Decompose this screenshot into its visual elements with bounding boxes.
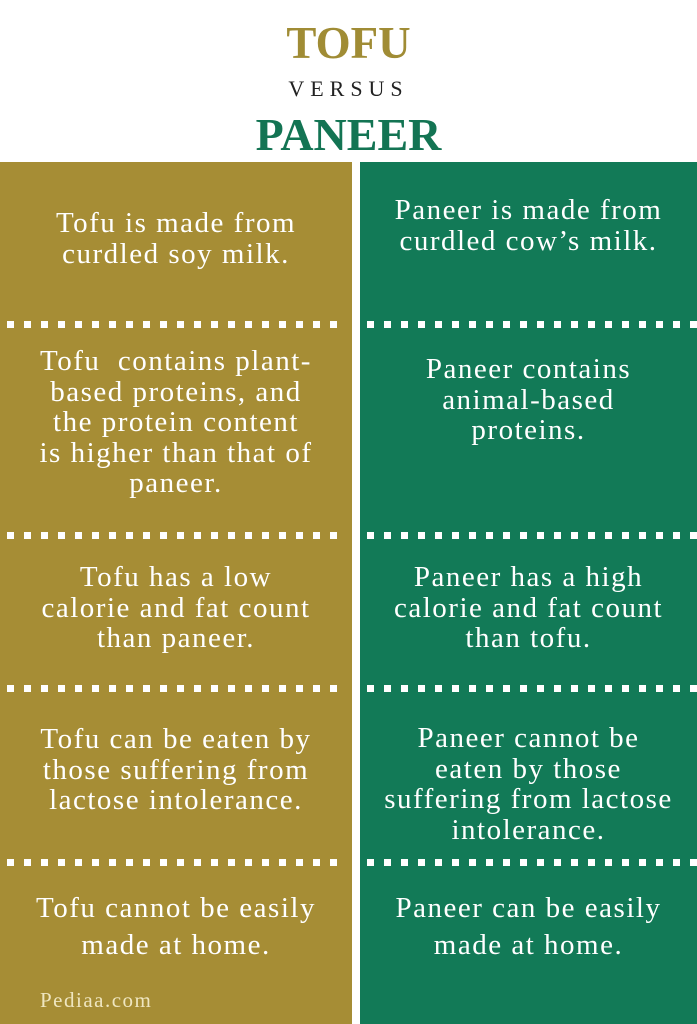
text: tofu row 5: Tofu cannot be easily — [36, 892, 316, 924]
text: paneer row 3: than tofu. — [465, 622, 592, 654]
text: tofu row 5: made at home. — [81, 929, 271, 961]
text: paneer row 2: proteins. — [471, 414, 586, 446]
text: paneer row 5 — [396, 892, 661, 961]
text: tofu row 2 — [39, 345, 312, 499]
text: tofu row 2: based proteins, and — [50, 376, 302, 408]
panel: paneer column — [360, 162, 697, 1024]
text: paneer row 1 — [395, 194, 662, 256]
text: tofu row 4: lactose intolerance. — [49, 784, 303, 816]
text: paneer row 4: suffering from lactose — [384, 783, 673, 815]
text: paneer row 5: made at home. — [434, 929, 623, 961]
text: paneer row 4: Paneer cannot be — [417, 722, 640, 754]
logo: pediaa: Pediaa.com — [40, 988, 152, 1012]
text: tofu row 4 — [40, 723, 312, 816]
text: paneer row 5: Paneer can be easily — [396, 892, 661, 924]
title: paneer: PANEER — [256, 109, 441, 160]
title: tofu: TOFU — [286, 18, 411, 68]
text: paneer row 1: curdled cow’s milk. — [399, 224, 658, 256]
text: tofu row 4: those suffering from — [43, 754, 309, 786]
text: paneer row 3: Paneer has a high — [414, 561, 643, 593]
text: paneer row 4 — [384, 722, 673, 846]
text: paneer row 2: animal-based — [442, 384, 615, 416]
text: paneer row 3 — [394, 561, 663, 654]
text: tofu row 2: Tofu contains plant- — [40, 345, 312, 377]
text: tofu row 5 — [36, 892, 316, 961]
text: tofu row 3: Tofu has a low — [80, 561, 272, 593]
text: tofu row 1: Tofu is made from — [56, 207, 296, 239]
text: paneer row 2: Paneer contains — [426, 353, 631, 385]
text: tofu row 1: curdled soy milk. — [62, 238, 290, 270]
text: tofu row 2: is higher than that of — [39, 436, 312, 468]
text: tofu row 3: calorie and fat count — [41, 592, 311, 624]
text: paneer row 4: intolerance. — [451, 814, 606, 846]
text: paneer row 1: Paneer is made from — [395, 194, 662, 226]
panel: tofu column — [0, 162, 352, 1024]
text: tofu row 3: than paneer. — [97, 622, 255, 654]
text: paneer row 3: calorie and fat count — [394, 592, 663, 624]
text: tofu row 4: Tofu can be eaten by — [40, 723, 312, 755]
text: paneer row 2 — [426, 353, 631, 446]
text: tofu row 2: the protein content — [53, 406, 299, 438]
subtitle: versus: VERSUS — [288, 76, 409, 101]
text: paneer row 4: eaten by those — [435, 752, 622, 784]
text: tofu row 1 — [56, 207, 296, 270]
text: tofu row 2: paneer. — [129, 467, 223, 499]
text: tofu row 3 — [41, 561, 311, 654]
